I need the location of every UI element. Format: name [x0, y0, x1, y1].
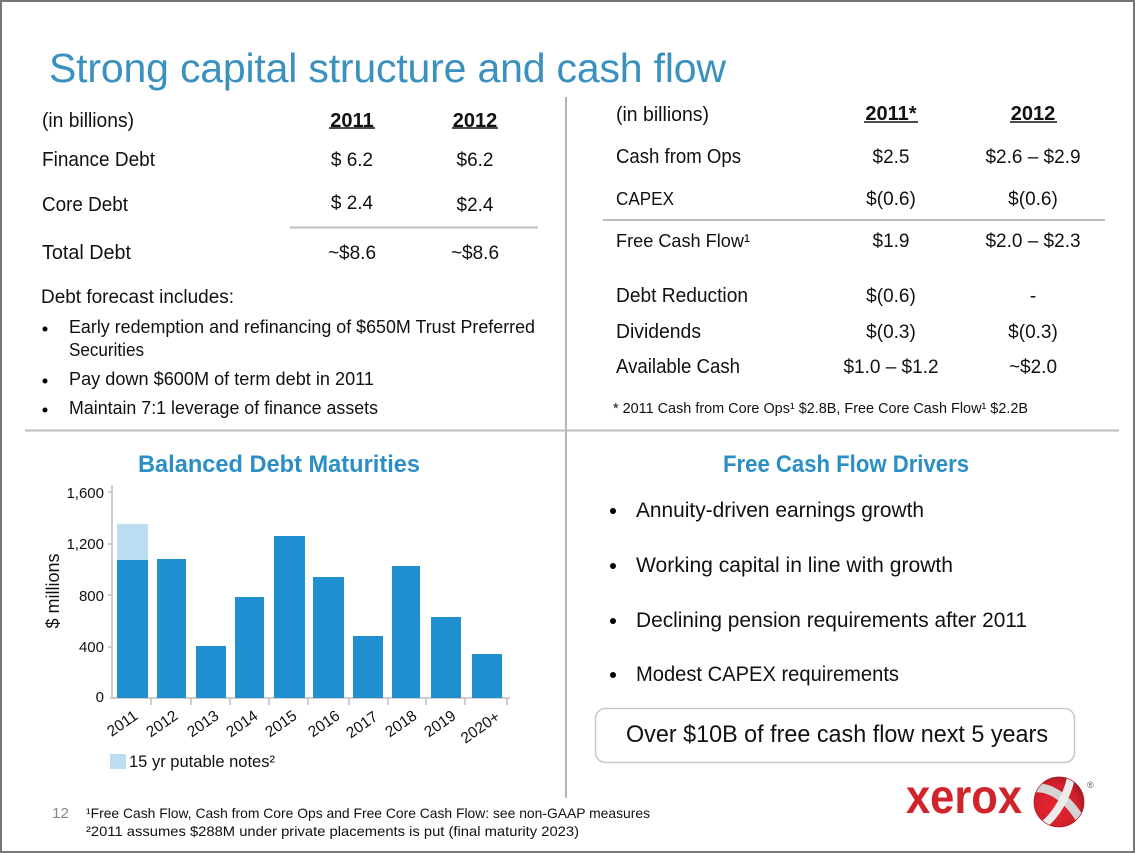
- panel: cash flow table: ~$2.0: [1009, 357, 1057, 378]
- bar chart: debt maturities: 400: [79, 639, 104, 656]
- bar chart: debt maturities: 2014: [223, 707, 262, 741]
- bar chart: debt maturities: 1,200: [66, 536, 104, 553]
- bar chart: debt maturities: 0: [96, 689, 104, 706]
- panel: debt table: $6.2: [457, 150, 493, 171]
- panel: debt table: Finance Debt: [42, 149, 155, 171]
- panel: cash flow table: $(0.3): [1008, 322, 1058, 343]
- title: Strong capital structure and cash flow: [49, 45, 726, 91]
- bar chart: debt maturities: 2019: [421, 707, 459, 741]
- panel: debt table: (in billions): [42, 110, 134, 132]
- panel: cash flow table: -: [1030, 286, 1036, 307]
- bar chart: debt maturities: 2011: [104, 707, 141, 740]
- panel: cash flow table: Free Cash Flow¹: [616, 230, 750, 251]
- page number: 12: [52, 805, 69, 822]
- panel: cash flow table: Available Cash: [616, 356, 740, 378]
- list: free cash flow drivers: Declining pension requirements after 2011: [636, 609, 1027, 632]
- footnotes: [86, 805, 650, 839]
- bar chart: debt maturities: 2016: [305, 707, 343, 741]
- callout: [596, 708, 1074, 762]
- cash table header 2011: 2011*: [865, 103, 917, 125]
- footnotes: ²2011 assumes $288M under private placements is put (final maturity 2023): [86, 823, 579, 839]
- panel: debt table: ~$8.6: [328, 243, 376, 264]
- bar chart: debt maturities: 2012: [143, 707, 181, 741]
- panel: cash flow table: $1.9: [873, 231, 909, 252]
- panel: cash flow table: $(0.6): [866, 189, 916, 210]
- panel: cash flow table: CAPEX: [616, 188, 674, 209]
- xerox logo: xerox: [906, 771, 1022, 824]
- panel: cash flow table: (in billions): [616, 104, 709, 126]
- text block: debt forecast: Pay down $600M of term debt in 2011: [69, 368, 374, 389]
- cash table header 2012: 2012: [1011, 103, 1055, 125]
- panel: cash flow table: Dividends: [616, 321, 701, 343]
- heading: free cash flow drivers: Free Cash Flow Drivers: [723, 451, 969, 478]
- debt table header 2012: 2012: [453, 110, 497, 132]
- panel: cash flow table: [603, 103, 1105, 417]
- text block: debt forecast: Maintain 7:1 leverage of finance assets: [69, 397, 378, 418]
- panel: debt table: $2.4: [457, 195, 494, 216]
- table footnote: * 2011 Cash from Core Ops¹ $2.8B, Free Core Cash Flow¹ $2.2B: [613, 400, 1028, 417]
- text block: debt forecast: Debt forecast includes:: [41, 287, 234, 308]
- bar chart: debt maturities: 1,600: [66, 485, 104, 502]
- panel: cash flow table: $2.5: [873, 147, 909, 168]
- y axis label: $ millions: [43, 554, 63, 628]
- panel: cash flow table: Cash from Ops: [616, 146, 741, 168]
- list: free cash flow drivers: [610, 499, 1027, 686]
- bar chart: debt maturities: [43, 485, 510, 771]
- bar chart: debt maturities: 2020+: [458, 708, 503, 747]
- bar chart: debt maturities: 2015: [262, 707, 300, 741]
- panel: cash flow table: $2.6 – $2.9: [985, 147, 1081, 168]
- bar chart: debt maturities: 2017: [343, 708, 381, 742]
- callout: Over $10B of free cash flow next 5 years: [626, 721, 1048, 748]
- text block: debt forecast: Securities: [69, 339, 144, 360]
- text block: debt forecast: Early redemption and refinancing of $650M Trust Preferred: [69, 316, 535, 337]
- panel: debt table: [42, 110, 538, 264]
- xerox logo: [906, 771, 1094, 827]
- panel: cash flow table: $(0.3): [866, 322, 916, 343]
- bar chart: debt maturities: 800: [79, 588, 104, 605]
- xerox logo: ®: [1087, 780, 1094, 790]
- panel: cash flow table: $(0.6): [866, 286, 916, 307]
- panel: cash flow table: $2.0 – $2.3: [985, 231, 1081, 252]
- heading: balanced debt maturities: Balanced Debt Maturities: [138, 451, 420, 478]
- panel: debt table: $ 2.4: [331, 193, 374, 214]
- legend: 15 yr putable notes²: [129, 752, 275, 771]
- bar chart: debt maturities: 2018: [382, 707, 420, 741]
- panel: debt table: Core Debt: [42, 194, 128, 216]
- text block: debt forecast: [41, 287, 535, 418]
- icon: xerox sphere: [1034, 777, 1084, 827]
- panel: cash flow table: Debt Reduction: [616, 285, 748, 307]
- list: free cash flow drivers: Modest CAPEX requirements: [636, 663, 899, 686]
- panel: debt table: ~$8.6: [451, 243, 499, 264]
- panel: cash flow table: $(0.6): [1008, 189, 1058, 210]
- list: free cash flow drivers: Working capital in line with growth: [636, 554, 953, 577]
- list: free cash flow drivers: Annuity-driven earnings growth: [636, 499, 924, 522]
- panel: debt table: Total Debt: [42, 242, 131, 264]
- footnotes: ¹Free Cash Flow, Cash from Core Ops and Free Core Cash Flow: see non-GAAP measures: [86, 805, 650, 821]
- panel: debt table: $ 6.2: [331, 150, 373, 171]
- debt table header 2011: 2011: [330, 110, 374, 132]
- panel: cash flow table: $1.0 – $1.2: [843, 357, 939, 378]
- bar chart: debt maturities: 2013: [184, 707, 222, 741]
